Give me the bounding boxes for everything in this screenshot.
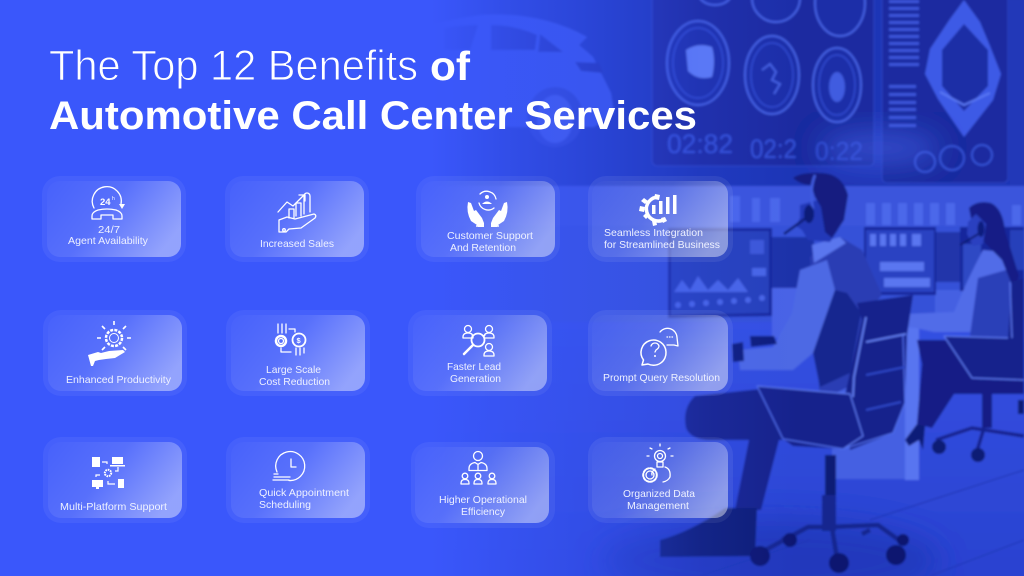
label (259, 364, 330, 388)
card: Organized Data Management (588, 437, 733, 523)
chair seat (757, 386, 863, 449)
icon: gear and coin (276, 324, 306, 355)
woman agent (904, 202, 1024, 462)
card: 24/7 Agent Availability (42, 176, 186, 262)
chair base (760, 525, 903, 564)
label: Enhanced Productivity (66, 374, 172, 386)
woman's legs and chair (917, 340, 1024, 428)
label: Agent Availability (68, 235, 149, 247)
label (259, 487, 349, 511)
floor (405, 322, 1024, 576)
man's head (796, 195, 838, 242)
label (447, 230, 533, 254)
label: Higher Operational (439, 494, 527, 506)
icon: bulb and gear (643, 444, 673, 482)
card: Customer Support And Retention (416, 176, 560, 262)
wall of screens: 0:22 (815, 136, 863, 166)
label: Efficiency (461, 506, 506, 518)
wall of screens: 02:2 (750, 134, 797, 164)
label: Faster Lead (447, 361, 501, 373)
icon: gear with bars (639, 194, 676, 226)
label (447, 361, 501, 385)
card: Multi-Platform Support (43, 437, 187, 523)
wall of screens: 02:82 (667, 129, 733, 159)
label: Organized Data (623, 488, 695, 500)
title: of (430, 43, 470, 89)
label: Generation (450, 373, 501, 385)
label: Management (627, 500, 689, 512)
man's torso (810, 237, 882, 401)
label (623, 488, 695, 512)
card: Large Scale Cost Reduction (226, 310, 370, 396)
icon: connected devices (92, 457, 125, 489)
icon: 24h phone (92, 187, 125, 219)
label: Cost Reduction (259, 376, 330, 388)
holographic diamond display (925, 0, 1001, 137)
glow across wall (820, 130, 940, 166)
label: And Retention (450, 242, 516, 254)
icon: people search (463, 326, 494, 356)
title (49, 42, 697, 138)
icon: hand with sun gear (88, 321, 131, 366)
title: Automotive Call Center Services (49, 94, 697, 138)
card: Prompt Query Resolution (588, 310, 733, 396)
icon: manager and team (461, 452, 496, 484)
icon: 24h phone: h (112, 196, 115, 202)
label: Prompt Query Resolution (603, 372, 720, 384)
icon: hand with rising chart (278, 193, 316, 232)
label: Quick Appointment (259, 487, 349, 499)
mid wall band (405, 186, 1024, 228)
card: Enhanced Productivity (43, 310, 187, 396)
icon: gear and coin: $ (296, 336, 302, 345)
man agent (660, 173, 913, 573)
wall of screens (405, 0, 1024, 188)
label: for Streamlined Business (604, 239, 720, 251)
card: Higher Operational Efficiency (411, 442, 555, 528)
label: Scheduling (259, 499, 311, 511)
label: 24/7 (98, 224, 120, 236)
chair back (845, 295, 913, 450)
card: Faster Lead Generation (408, 310, 552, 396)
icon: clock with speed lines (273, 452, 305, 481)
label: Seamless Integration (604, 227, 703, 239)
title: The Top 12 Benefits (49, 42, 418, 90)
man's leg (685, 388, 865, 510)
left fade over photo (380, 0, 1024, 576)
icon: caring hands (467, 191, 508, 227)
icon: 24h phone: 24 (100, 197, 111, 208)
icon: speech bubbles (641, 328, 678, 365)
label (604, 227, 720, 251)
card: Quick Appointment Scheduling (226, 437, 370, 523)
card: Seamless Integration (588, 176, 733, 262)
label: Increased Sales (260, 238, 334, 250)
label (68, 224, 149, 247)
car (415, 14, 614, 147)
label: Multi-Platform Support (60, 501, 167, 513)
label: Large Scale (266, 364, 321, 376)
label: Customer Support (447, 230, 533, 242)
desk (772, 288, 864, 338)
chair pole (825, 455, 836, 505)
monitors (668, 227, 1024, 318)
label (439, 494, 527, 518)
card: Increased Sales (225, 176, 369, 262)
background photo: call center agents (405, 0, 1024, 576)
